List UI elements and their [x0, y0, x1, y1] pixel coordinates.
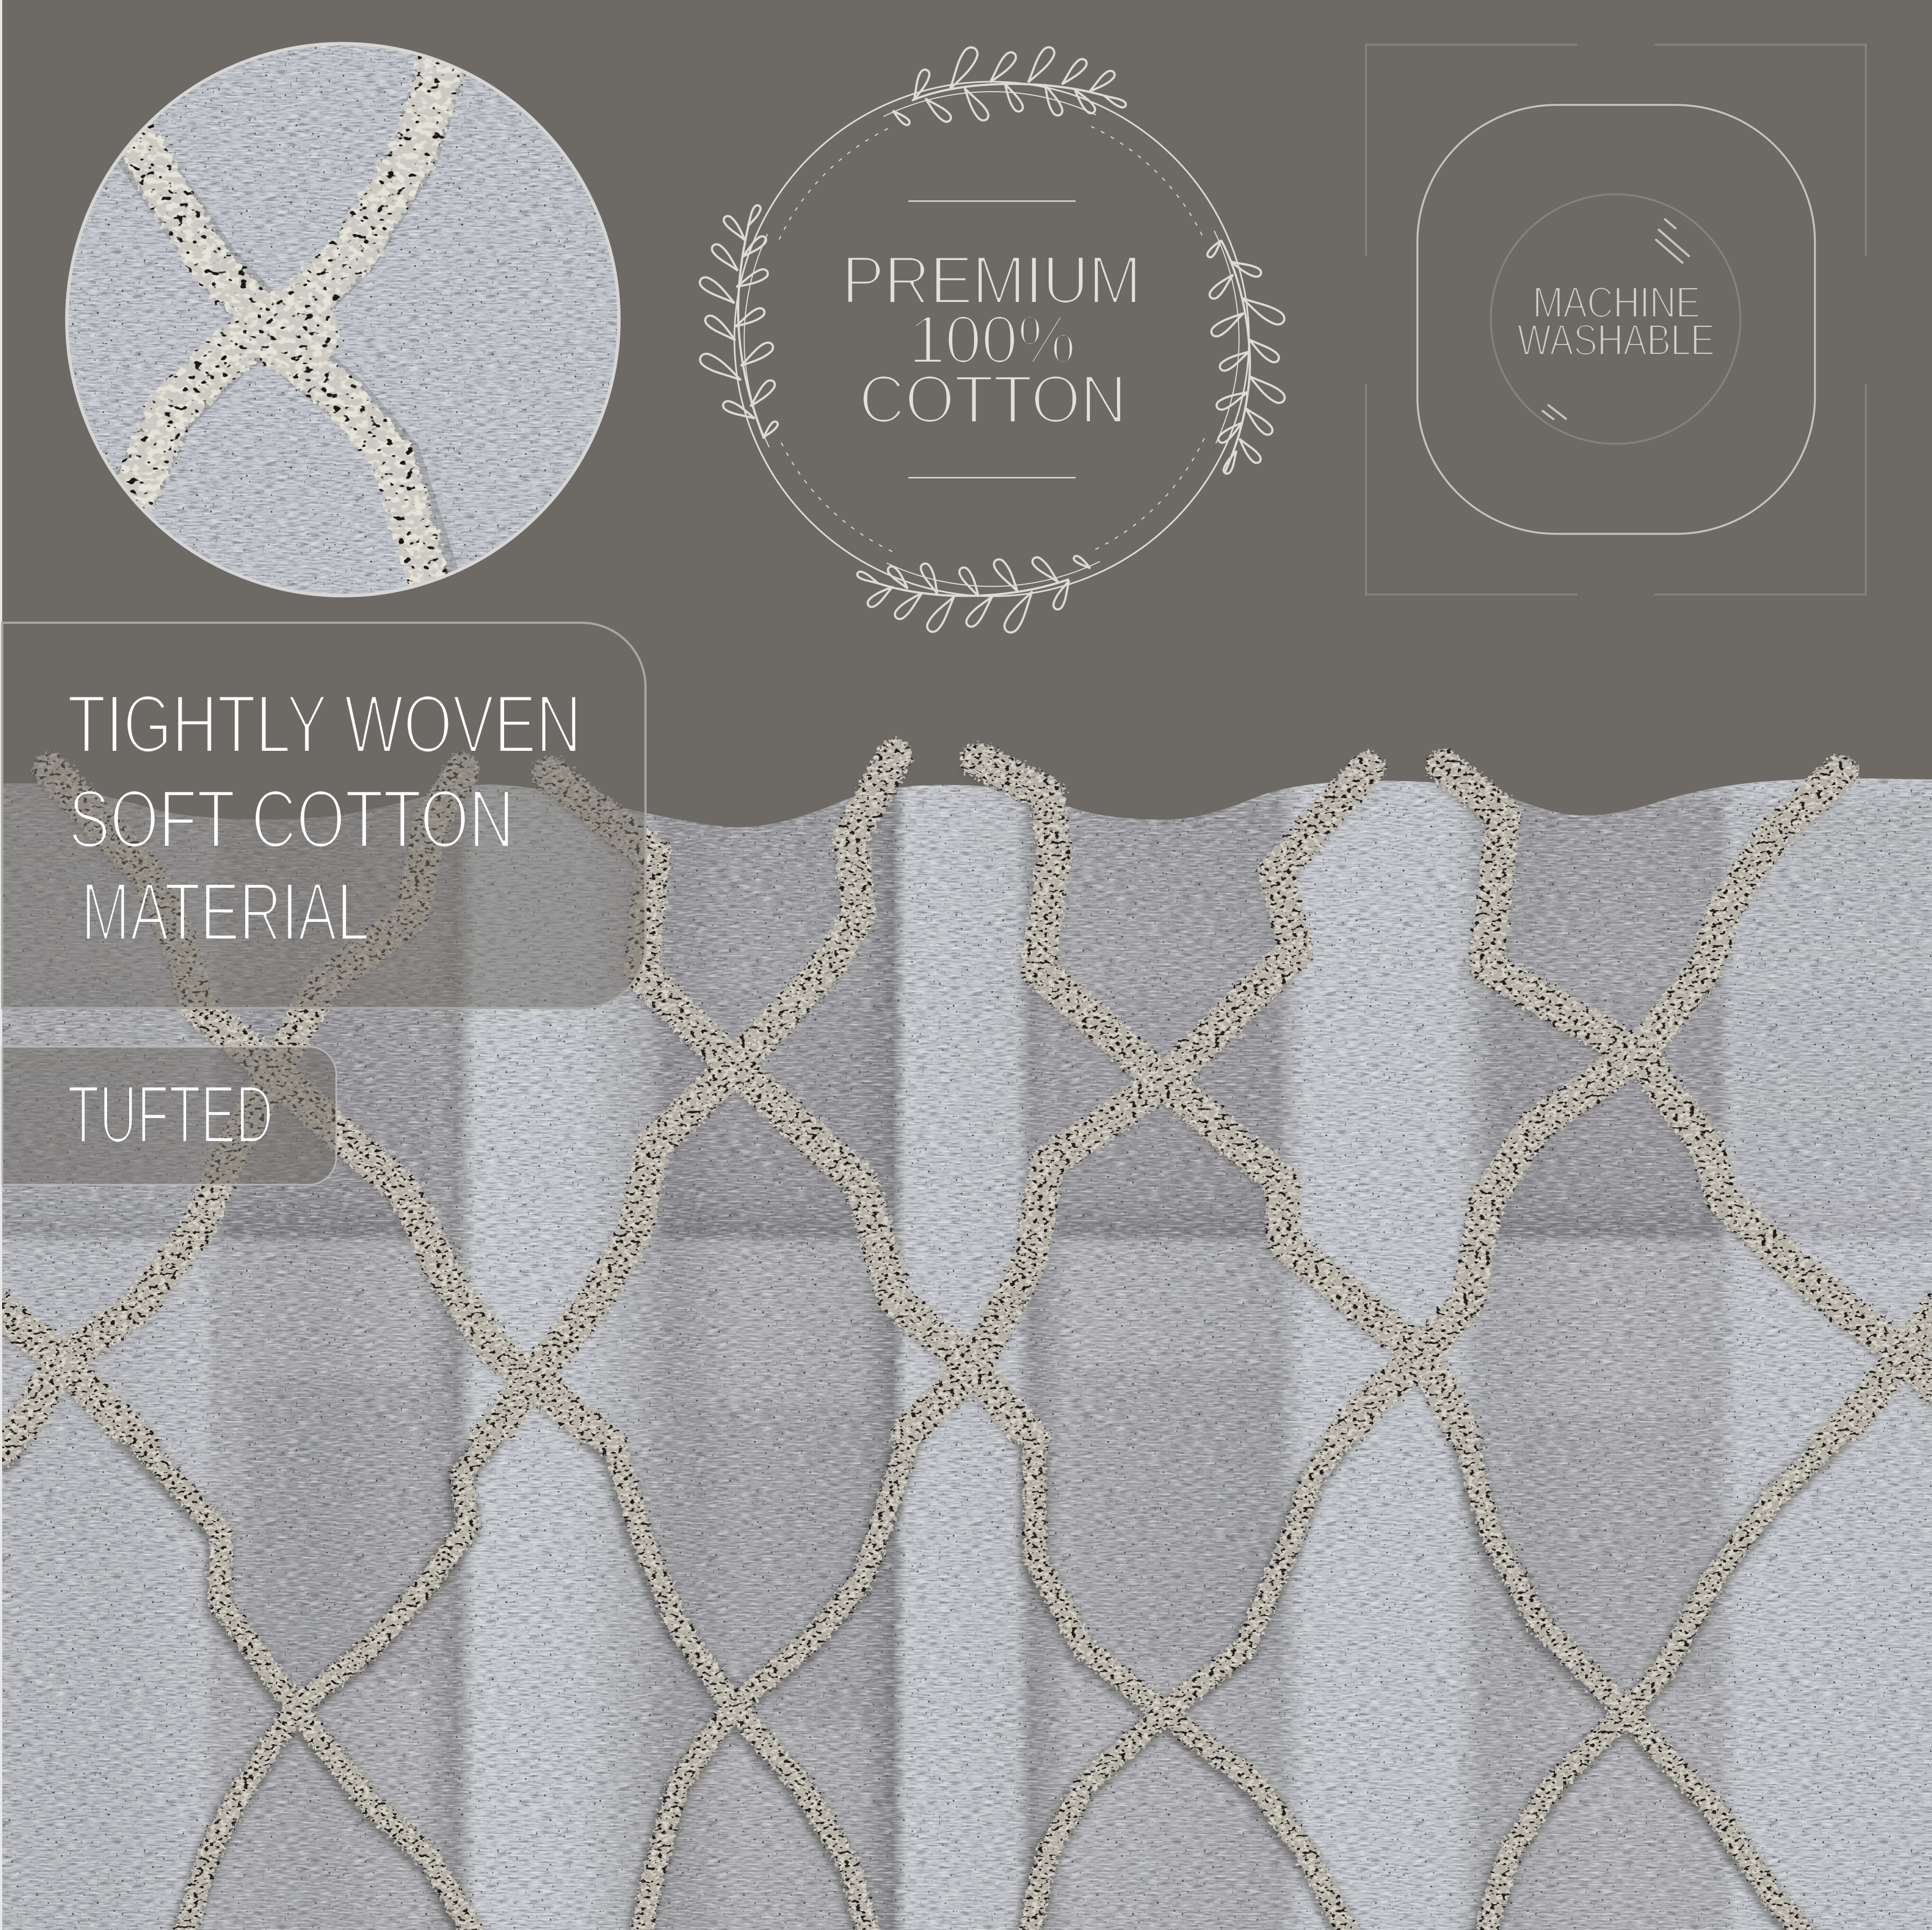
tufted trellis pattern on curtain [0, 756, 1932, 1930]
drum glints [1543, 219, 1689, 419]
inner dashed arcs [779, 126, 1204, 552]
washer drum [1491, 194, 1740, 444]
tufted box [2, 1047, 336, 1185]
panel: tightly woven soft cotton material [2, 623, 645, 1008]
washable text: MACHINE [1533, 278, 1700, 327]
panel text: MATERIAL [81, 865, 369, 958]
panel: tufted [2, 1047, 336, 1185]
panel box [2, 623, 645, 1008]
detail circle: tufted close-up [63, 39, 624, 602]
tuft shadows [0, 760, 1932, 1930]
badge text: 100% [909, 302, 1076, 378]
close-up ring [67, 44, 619, 596]
bottom rule [908, 477, 1076, 478]
wreath branches and leaves [697, 45, 1287, 635]
tufted text: TUFTED [67, 1068, 273, 1160]
panel text [67, 677, 581, 958]
badge text [842, 242, 1141, 438]
badge text: PREMIUM [842, 242, 1141, 319]
left edge line [0, 0, 2, 1930]
corner brackets [1366, 45, 1866, 595]
curtain fabric photo [0, 740, 1932, 1930]
wreath circle [734, 82, 1249, 596]
panel text: TIGHTLY WOVEN [67, 677, 581, 770]
badge: premium 100% cotton wreath [697, 45, 1287, 635]
washer body [1417, 105, 1815, 534]
badge: machine washable [1366, 45, 1866, 595]
washable text: WASHABLE [1517, 315, 1714, 364]
badge text: COTTON [859, 362, 1126, 438]
close-up fabric [63, 39, 624, 602]
panel text: SOFT COTTON [68, 772, 514, 865]
washable text [1517, 278, 1714, 364]
inner solid arcs [744, 92, 1239, 586]
top rule [908, 200, 1076, 202]
